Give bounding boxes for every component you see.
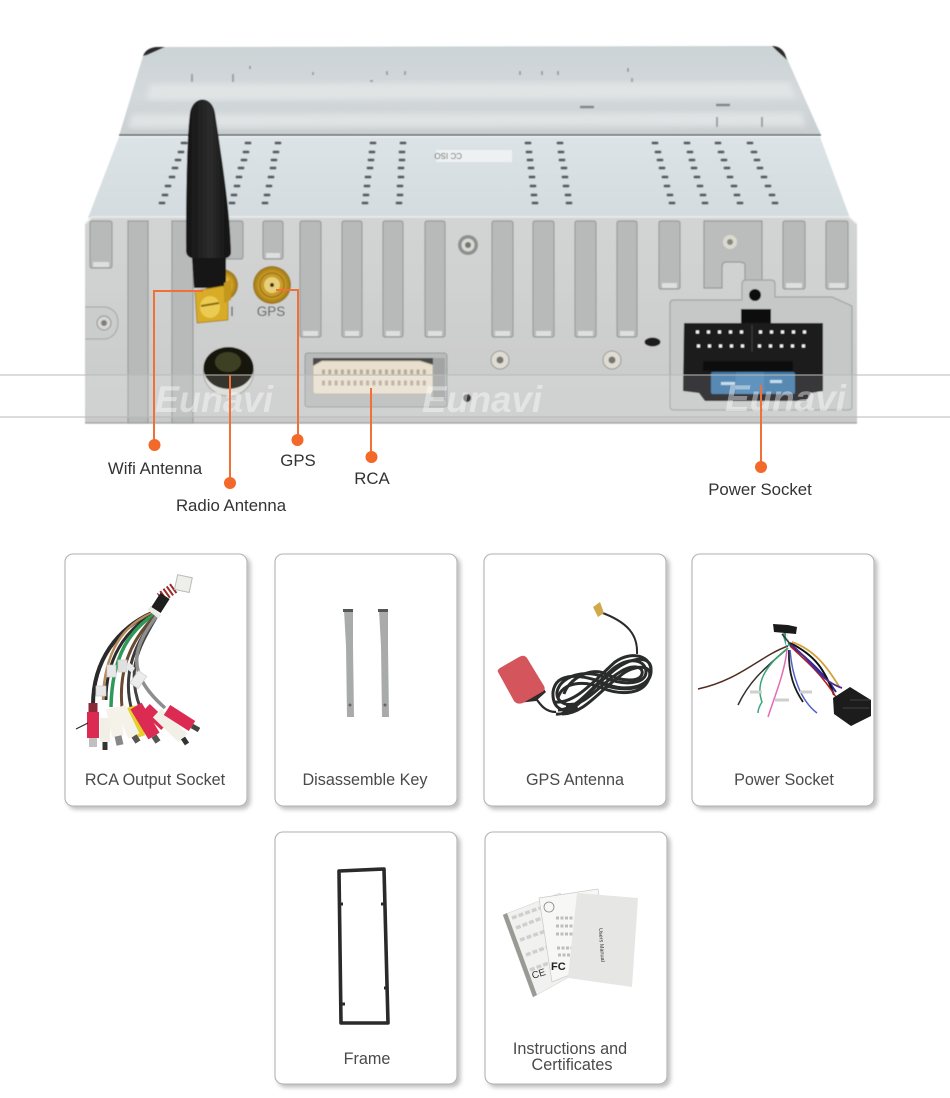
top cover panel: [119, 46, 821, 136]
card: Power Socket: [692, 554, 874, 806]
watermark: center: Eunavi: [422, 379, 543, 420]
connector pins: [696, 332, 746, 346]
icon: RCA cable harness: [76, 575, 199, 750]
white sticker: CC ISO: [434, 151, 462, 160]
caption: Frame: [344, 1050, 390, 1068]
bracket above power socket: [704, 221, 762, 288]
small holes: [463, 338, 660, 402]
ventilation holes: [160, 143, 777, 203]
GPS connector: [253, 266, 291, 319]
WIFI connector and antenna: [186, 100, 238, 323]
GPS connector: GPS: [257, 304, 285, 319]
callout: GPS: GPS: [280, 451, 316, 470]
radio antenna hole: [204, 347, 254, 396]
left side plate: [85, 307, 118, 339]
callout: Wifi Antenna: [108, 291, 203, 478]
icon: documents: [503, 889, 638, 997]
callout: Power Socket: Power Socket: [708, 480, 812, 499]
white sticker: [434, 150, 512, 162]
FC mark: FC: [551, 961, 566, 973]
callout: RCA: [354, 388, 391, 488]
watermark band lines: [0, 375, 950, 417]
callout: Wifi Antenna: Wifi Antenna: [108, 459, 203, 478]
callout: RCA: RCA: [354, 469, 391, 488]
watermark band: [85, 375, 857, 417]
caption: Power Socket: [734, 771, 834, 789]
icon: GPS puck and cable: [498, 602, 651, 714]
icon: two removal keys: [343, 609, 389, 717]
WIFI connector and antenna: I: [230, 304, 234, 319]
vertical grooves: [90, 221, 848, 423]
RCA port: [305, 353, 447, 407]
icon: power harness: [698, 624, 871, 726]
device: rear view of head unit: [85, 46, 857, 423]
card: Instructions and Certificates: [485, 832, 667, 1084]
card: RCA Output Socket: [65, 554, 247, 806]
caption: Disassemble Key: [302, 771, 428, 789]
front face: [85, 217, 857, 423]
blue fuse block: [711, 372, 795, 394]
middle ventilated panel: [88, 137, 850, 218]
card: GPS Antenna: [484, 554, 666, 806]
caption: RCA Output Socket: [85, 771, 226, 789]
CE mark: CE: [531, 967, 547, 982]
callout: Radio Antenna: [176, 375, 287, 515]
watermark: left: Eunavi: [155, 379, 274, 420]
icon: mounting frame: [339, 869, 388, 1023]
caption line 2: Certificates: [532, 1056, 612, 1074]
callout: GPS: [276, 290, 316, 470]
power socket recess and connector: [670, 280, 852, 410]
card: Disassemble Key: [275, 554, 457, 806]
callout: Power Socket: [708, 385, 812, 499]
caption: GPS Antenna: [526, 771, 624, 789]
screws: [97, 235, 841, 369]
groove bottom highlights: [93, 253, 845, 336]
watermark: right: Eunavi: [725, 378, 847, 419]
card: Frame: [275, 832, 457, 1084]
caption: Instructions and: [513, 1040, 627, 1058]
callout: Radio Antenna: Radio Antenna: [176, 496, 287, 515]
manual cover label: Users Manual: [597, 928, 605, 962]
